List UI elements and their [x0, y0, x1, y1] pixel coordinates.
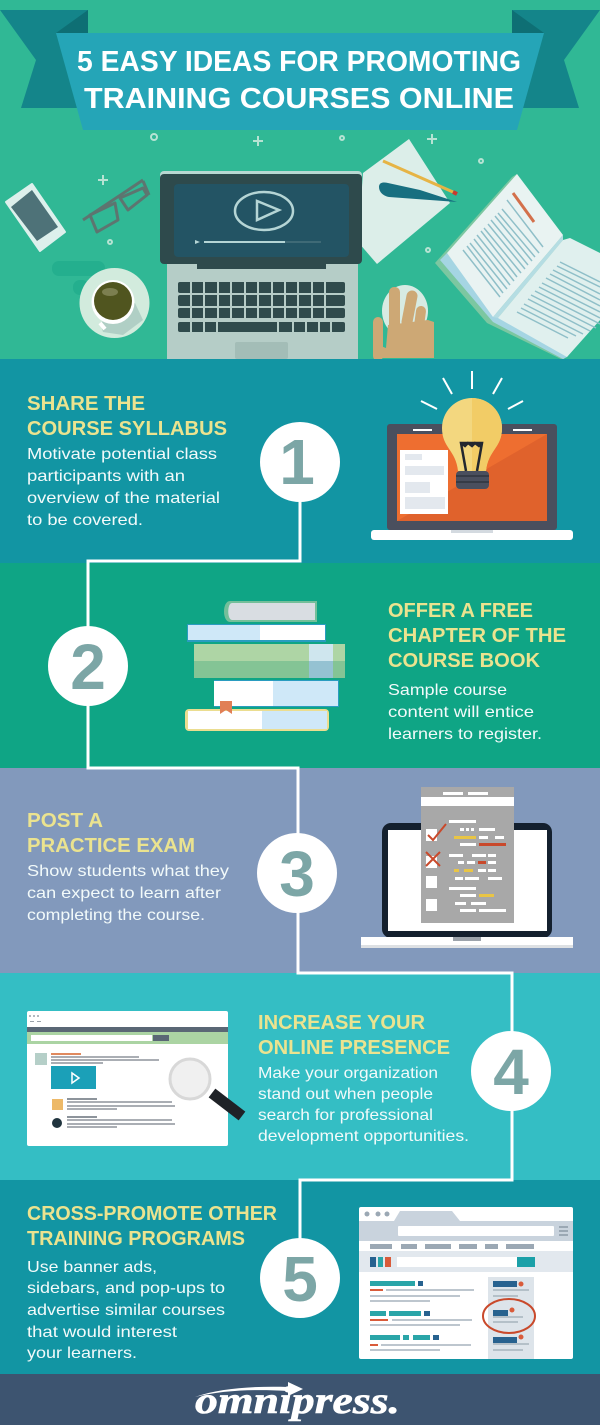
heading: OFFER A FREE — [388, 600, 533, 622]
footer — [0, 1374, 600, 1425]
body text — [27, 446, 220, 529]
body text: can expect to learn after — [27, 885, 222, 902]
heading: COURSE BOOK — [388, 650, 541, 672]
panel: step 1 — [0, 359, 600, 563]
icon: laptop with light bulb — [371, 371, 573, 540]
ribbon right tail — [512, 10, 600, 108]
body text: that would interest — [27, 1324, 178, 1341]
body text: Use banner ads, — [27, 1259, 157, 1276]
icon: book stack — [185, 601, 345, 731]
body text: completing the course. — [27, 907, 205, 924]
icon: coffee cup — [52, 261, 150, 338]
number 4: 4 — [493, 1036, 529, 1108]
heading: SHARE THE — [27, 393, 145, 415]
number 3: 3 — [279, 838, 315, 910]
body text: learners to register. — [388, 726, 542, 743]
heading: ONLINE PRESENCE — [258, 1037, 450, 1059]
number 1 — [260, 422, 340, 502]
heading — [27, 393, 227, 440]
icon: glasses — [83, 180, 149, 232]
panel: step 4 — [0, 973, 600, 1180]
icon: browser window with ads — [359, 1207, 573, 1359]
title — [77, 46, 521, 115]
icon: search results page with magnifier — [27, 1011, 242, 1146]
connector line — [88, 462, 512, 1278]
body text: Show students what they — [27, 863, 229, 880]
heading: CHAPTER OF THE — [388, 625, 566, 647]
panel: step 5 — [0, 1180, 600, 1374]
body text: content will entice — [388, 704, 534, 721]
heading: PRACTICE EXAM — [27, 835, 195, 857]
body text — [27, 1259, 225, 1362]
title: TRAINING COURSES ONLINE — [84, 83, 514, 115]
heading: COURSE SYLLABUS — [27, 418, 227, 440]
body text: search for professional — [258, 1107, 433, 1124]
body text: advertise similar courses — [27, 1302, 225, 1319]
icon: laptop with exam — [361, 787, 573, 948]
heading: INCREASE YOUR — [258, 1012, 426, 1034]
panel: step 2 — [0, 563, 600, 768]
heading: TRAINING PROGRAMS — [27, 1228, 245, 1250]
title: 5 EASY IDEAS FOR PROMOTING — [77, 46, 521, 78]
panel: hero — [0, 0, 600, 360]
icon: phone — [6, 184, 65, 251]
body text: stand out when people — [258, 1086, 433, 1103]
body text: to be covered. — [27, 512, 143, 529]
icon: paper, pencil and pen — [358, 139, 457, 264]
body text: sidebars, and pop-ups to — [27, 1280, 225, 1297]
body text: your learners. — [27, 1345, 137, 1362]
heading — [388, 600, 566, 672]
decorative sparkles — [98, 134, 483, 252]
title banner — [56, 33, 544, 130]
panel: step 3 — [0, 768, 600, 973]
heading: CROSS-PROMOTE OTHER — [27, 1203, 278, 1225]
number 2 — [48, 626, 128, 706]
heading — [27, 1203, 278, 1250]
number 5 — [260, 1238, 340, 1318]
number 3 — [257, 833, 337, 913]
body text: Sample course — [388, 682, 507, 699]
icon: open book — [435, 174, 600, 360]
number 5: 5 — [282, 1243, 318, 1315]
body text — [27, 863, 229, 924]
number 2: 2 — [70, 631, 106, 703]
body text: development opportunities. — [258, 1128, 469, 1145]
body text: participants with an — [27, 468, 185, 485]
body text — [388, 682, 542, 743]
body text: Motivate potential class — [27, 446, 217, 463]
body text: Make your organization — [258, 1065, 438, 1082]
body text — [258, 1065, 469, 1145]
icon: laptop — [160, 171, 362, 359]
icon: mouse and hand — [378, 285, 434, 358]
body text: overview of the material — [27, 490, 220, 507]
number 4 — [471, 1031, 551, 1111]
heading — [258, 1012, 450, 1059]
heading — [27, 810, 195, 857]
number 1: 1 — [279, 426, 315, 498]
keyboard — [178, 282, 345, 332]
heading: POST A — [27, 810, 103, 832]
logo: omnipress: omnipress. — [195, 1380, 400, 1422]
ribbon left tail — [0, 10, 88, 108]
